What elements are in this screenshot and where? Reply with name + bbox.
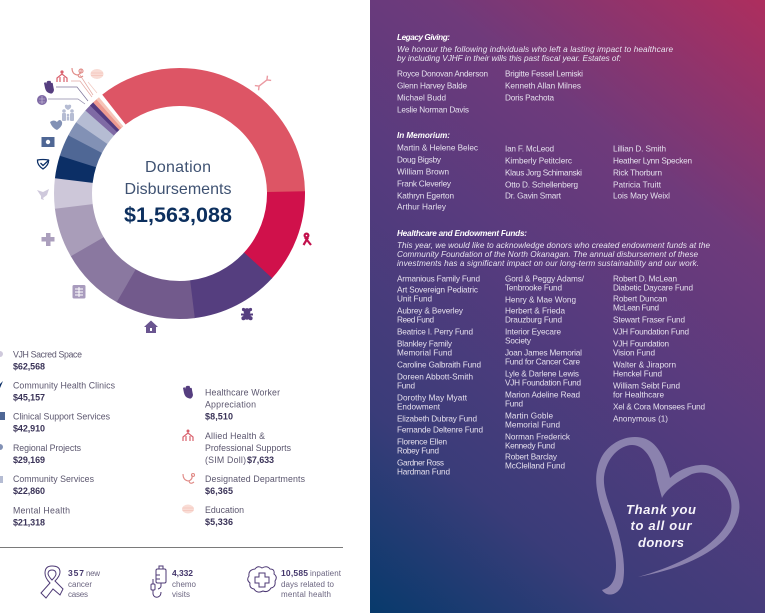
- text block: healthcare and endowment funds: Robert Barclay: [505, 452, 558, 462]
- donut centre label: [124, 159, 232, 227]
- text block: healthcare and endowment funds: Vision Fund: [613, 348, 655, 358]
- stat: chemo visits: chemo: [172, 580, 197, 589]
- text block: healthcare and endowment funds: Henckel Fund: [613, 370, 662, 378]
- text block: healthcare and endowment funds: McClelland Fund: [505, 462, 565, 470]
- text block: healthcare and endowment funds: Drauzburg Fund: [505, 316, 562, 324]
- heart outline: [596, 437, 739, 595]
- text block: legacy giving: Legacy Giving:: [397, 33, 450, 42]
- icon: home: [144, 320, 158, 333]
- icon: hand: [44, 81, 54, 94]
- text block: in memorium: Arthur Harley: [397, 202, 447, 212]
- text block: in memorium: Martin & Helene Belec: [397, 144, 478, 152]
- stat: new cancer cases: new: [86, 569, 100, 578]
- text block: healthcare and endowment funds: Walter & Jiraporn: [613, 360, 676, 370]
- icon: brain: [37, 95, 47, 105]
- callout: thank you: Thank you: [626, 502, 696, 517]
- stat: inpatient days: days related to: [281, 580, 335, 589]
- legend: left column: $22,860: [13, 486, 45, 496]
- text block: in memorium: William Brown: [397, 168, 449, 176]
- text block: legacy giving: Michael Budd: [397, 94, 446, 102]
- text block: healthcare and endowment funds: Martin Goble: [505, 412, 553, 420]
- legend icon: hand: [183, 386, 193, 399]
- text block: healthcare and endowment funds: Blankley Family: [397, 340, 453, 348]
- legend: left column: $42,910: [13, 424, 45, 434]
- legend: left column: [0, 350, 116, 528]
- legend: right column: Allied Health &: [205, 431, 265, 441]
- text block: legacy giving: Doris Pachota: [505, 94, 554, 102]
- legend: left column: $45,157: [13, 392, 45, 402]
- legend: right column: $8,510: [205, 412, 233, 422]
- text block: healthcare and endowment funds: Aubrey & Beverley: [397, 306, 464, 316]
- text block: healthcare and endowment funds: Joan James Memorial: [505, 348, 582, 358]
- legend: right column: (SIM Doll): [205, 455, 246, 465]
- text block: in memorium: In Memorium:: [397, 131, 450, 140]
- legend: left column: $29,169: [13, 455, 45, 465]
- icon: ribbon: [304, 234, 311, 245]
- text block: healthcare and endowment funds: Florence Ellen: [397, 438, 447, 446]
- panel: right gradient background: [370, 0, 765, 613]
- leader lines: [48, 75, 97, 104]
- donut centre label: $1,563,088: [124, 203, 232, 227]
- legend: right column: $6,365: [205, 486, 233, 496]
- legend clipped icons: [0, 351, 5, 483]
- text block: healthcare and endowment funds: Memorial Fund: [505, 420, 560, 430]
- legend: right column: $5,336: [205, 517, 233, 527]
- text block: legacy giving: Glenn Harvey Balde: [397, 82, 467, 90]
- text block: healthcare and endowment funds: Art Sovereign Pediatric: [397, 286, 478, 294]
- text block: healthcare and endowment funds: Hardman Fund: [397, 468, 450, 476]
- icon: brain with cross: [248, 567, 276, 592]
- text block: in memorium: Dr. Gavin Smart: [505, 192, 562, 200]
- donut chart: [29, 43, 330, 344]
- text block: healthcare and endowment funds: Norman Frederick: [505, 432, 571, 442]
- text block: healthcare and endowment funds: Society: [505, 336, 532, 346]
- icon: teddy bear: [241, 308, 253, 320]
- text block: healthcare and endowment funds: Dorothy May Myatt: [397, 394, 468, 402]
- icon: stethoscope: [72, 68, 83, 77]
- text block: in memorium: Kimberly Petitclerc: [505, 156, 572, 166]
- text block: in memorium: Lillian D. Smith: [613, 144, 666, 154]
- legend: right column: [182, 386, 306, 527]
- text block: in memorium: Klaus Jorg Schimanski: [505, 168, 582, 178]
- legend: left column: $62,568: [13, 362, 45, 372]
- icon: ribbon outline: [41, 566, 63, 598]
- text block: healthcare and endowment funds: Robert Duncan: [613, 294, 667, 304]
- text block: legacy giving: Brigitte Fessel Lemiski: [505, 70, 583, 78]
- text block: healthcare and endowment funds: Herbert & Frieda: [505, 306, 565, 316]
- stat: chemo visits: [151, 566, 197, 599]
- text block: healthcare and endowment funds: Lyle & Darlene Lewis: [505, 370, 579, 378]
- stat: chemo visits: visits: [172, 590, 190, 599]
- legend: left column: $21,318: [13, 518, 45, 528]
- text block: healthcare and endowment funds: Reed Fund: [397, 316, 434, 324]
- legend icon: stethoscope: [183, 474, 194, 483]
- text block: healthcare and endowment funds: William Seibt Fund: [613, 382, 680, 390]
- legend: left column: VJH Sacred Space: [13, 350, 82, 360]
- text block: healthcare and endowment funds: Caroline Galbraith Fund: [397, 360, 481, 370]
- text block: healthcare and endowment funds: Xel & Cora Monsees Fund: [613, 402, 705, 412]
- text block: healthcare and endowment funds: Unit Fund: [397, 294, 432, 304]
- text block: healthcare and endowment funds: Kennedy Fund: [505, 442, 555, 450]
- stat: new cancer cases: cancer: [68, 580, 92, 589]
- text block: healthcare and endowment funds: Stewart Fraser Fund: [613, 316, 685, 324]
- stat: new cancer cases: 357: [68, 568, 84, 578]
- text block: in memorium: Doug Bigsby: [397, 156, 442, 164]
- divider: [0, 547, 343, 548]
- icon: heart speech: [50, 120, 62, 130]
- text block: healthcare and endowment funds: Fernande Deltenre Fund: [397, 426, 483, 434]
- text block: in memorium: Ian F. McLeod: [505, 144, 554, 154]
- stat: inpatient days: [248, 567, 342, 599]
- callout: thank you: [626, 502, 696, 550]
- stat: inpatient days: 10,585: [281, 568, 308, 578]
- stat: new cancer cases: cases: [68, 590, 88, 599]
- text block: in memorium: Rick Thorburn: [613, 168, 662, 178]
- text block: in memorium: Lois Mary Weixl: [613, 192, 670, 200]
- legend: left column: Community Health Clinics: [13, 380, 116, 390]
- text block: healthcare and endowment funds: for Healthcare: [613, 390, 664, 400]
- icon: ribcage x-ray: [72, 285, 86, 298]
- stat: chemo visits: 4,332: [172, 568, 193, 578]
- text block: healthcare and endowment funds: Fund: [397, 382, 415, 390]
- text block: legacy giving: Leslie Norman Davis: [397, 106, 469, 114]
- text block: legacy giving: by including VJHF in their wills this past fiscal year. Estates of:: [397, 54, 621, 63]
- legend: right column: Appreciation: [205, 400, 256, 410]
- text block: healthcare and endowment funds: Beatrice I. Perry Fund: [397, 328, 473, 336]
- callout: thank you: donors: [638, 535, 684, 550]
- text block: healthcare and endowment funds: [397, 229, 710, 476]
- text block: in memorium: [397, 131, 692, 212]
- legend: right column: $7,633: [247, 455, 274, 465]
- icon: heart check: [37, 160, 49, 169]
- text block: healthcare and endowment funds: Armanious Family Fund: [397, 274, 480, 284]
- text block: in memorium: Heather Lynn Specken: [613, 156, 692, 166]
- text block: in memorium: Kathryn Egerton: [397, 192, 454, 200]
- text block: legacy giving: We honour the following individuals who left a lasting impact to healthcare: [397, 45, 673, 54]
- donut centre label: Disbursements: [124, 181, 232, 198]
- icon: books: [90, 69, 104, 79]
- text block: in memorium: Frank Cleverley: [397, 180, 452, 188]
- icon: allied health doll: [57, 70, 67, 82]
- text block: healthcare and endowment funds: Gardner Ross: [397, 458, 444, 468]
- legend: left column: Regional Projects: [13, 443, 82, 453]
- text block: healthcare and endowment funds: Healthcare and Endowment Funds:: [397, 229, 527, 238]
- text block: legacy giving: [397, 33, 673, 114]
- text block: healthcare and endowment funds: Gord & Peggy Adams/: [505, 274, 585, 284]
- icon: family: [62, 105, 74, 121]
- text block: healthcare and endowment funds: Tenbrooke Fund: [505, 284, 562, 292]
- stat: new cancer cases: [41, 566, 100, 599]
- legend: right column: Education: [205, 505, 244, 515]
- text block: healthcare and endowment funds: Interior Eyecare: [505, 328, 561, 336]
- text block: legacy giving: Kenneth Allan Milnes: [505, 82, 581, 90]
- text block: healthcare and endowment funds: Robey Fund: [397, 446, 439, 456]
- donut centre label: Donation: [145, 159, 211, 176]
- stat: inpatient days: inpatient: [310, 569, 342, 578]
- text block: legacy giving: Royce Donovan Anderson: [397, 70, 488, 78]
- legend: right column: Designated Departments: [205, 474, 306, 484]
- legend: right column: Professional Supports: [205, 443, 292, 453]
- text block: healthcare and endowment funds: Elizabeth Dubray Fund: [397, 414, 477, 424]
- icon: plus: [42, 233, 54, 246]
- text block: healthcare and endowment funds: This year, we would like to acknowledge donors who created endowment funds at the: [397, 241, 710, 250]
- legend: left column: Community Services: [13, 474, 95, 484]
- text block: healthcare and endowment funds: Fund: [505, 400, 523, 408]
- legend icon: allied: [183, 430, 193, 441]
- text block: healthcare and endowment funds: VJH Foundation Fund: [505, 378, 581, 388]
- text block: healthcare and endowment funds: investments has a significant impact on our long-term sustainability and our work.: [397, 259, 699, 268]
- text block: healthcare and endowment funds: Robert D. McLean: [613, 274, 677, 284]
- text block: healthcare and endowment funds: VJH Foundation: [613, 340, 669, 348]
- icon: chemo bag: [151, 566, 166, 597]
- text block: healthcare and endowment funds: Community Foundation of the North Okanagan. The annual disbursement of these: [397, 250, 698, 259]
- icon: camera box: [42, 137, 54, 147]
- legend: right column: Healthcare Worker: [205, 388, 280, 398]
- text block: in memorium: Patricia Truitt: [613, 180, 662, 190]
- legend: left column: Clinical Support Services: [13, 412, 111, 422]
- icon: bone / surgical tool: [255, 76, 271, 90]
- stat: inpatient days: mental health: [281, 590, 331, 599]
- legend icon: books: [182, 504, 194, 514]
- text block: healthcare and endowment funds: Anonymous (1): [613, 414, 668, 424]
- text block: healthcare and endowment funds: Diabetic Daycare Fund: [613, 284, 693, 292]
- text block: healthcare and endowment funds: McLean Fund: [613, 304, 659, 312]
- text block: healthcare and endowment funds: VJH Foundation Fund: [613, 328, 689, 336]
- text block: in memorium: Otto D. Schellenberg: [505, 180, 578, 190]
- text block: healthcare and endowment funds: Memorial Fund: [397, 348, 452, 358]
- text block: healthcare and endowment funds: Endowment: [397, 402, 441, 412]
- text block: healthcare and endowment funds: Fund for Cancer Care: [505, 358, 580, 366]
- legend: left column: Mental Health: [13, 506, 70, 516]
- callout: thank you: to all our: [630, 518, 692, 533]
- text block: healthcare and endowment funds: Marion Adeline Read: [505, 390, 580, 400]
- text block: healthcare and endowment funds: Doreen Abbott-Smith: [397, 372, 473, 382]
- icon: dove: [37, 189, 49, 200]
- text block: healthcare and endowment funds: Henry & Mae Wong: [505, 296, 576, 304]
